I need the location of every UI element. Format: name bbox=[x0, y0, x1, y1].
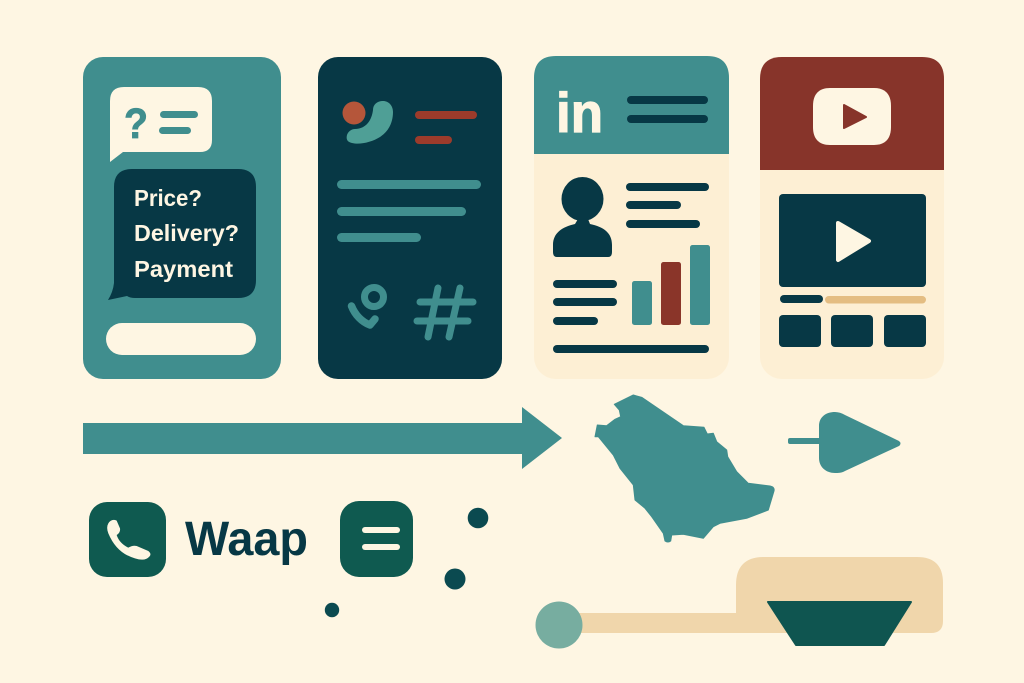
linkedin header bbox=[534, 56, 729, 154]
icon: menu tile bbox=[340, 501, 413, 577]
brand name: Waap bbox=[185, 513, 308, 566]
scattered dots bbox=[325, 508, 488, 617]
connector with tray bbox=[536, 557, 943, 648]
icon: question speech bubble: ? bbox=[124, 100, 148, 148]
video player bbox=[779, 194, 926, 287]
icon: location call bbox=[352, 288, 384, 325]
panel: linkedin card bbox=[534, 56, 729, 379]
bar chart bbox=[632, 245, 710, 325]
callout: price delivery payment: Payment bbox=[134, 256, 233, 282]
panel: youtube card bbox=[760, 57, 944, 379]
map: Saudi Arabia bbox=[595, 395, 774, 542]
thumbnails bbox=[779, 315, 926, 347]
profile lines bbox=[553, 183, 709, 353]
icon: dot and comma shape bbox=[342, 101, 393, 144]
callout: price delivery payment: Price? bbox=[134, 185, 202, 211]
linkedin header: in bbox=[556, 81, 603, 144]
callout: price delivery payment: Delivery? bbox=[134, 220, 239, 246]
panel: question card bbox=[83, 57, 281, 379]
icon: profile person bbox=[553, 177, 612, 257]
arrow: large teal bbox=[83, 407, 562, 469]
callout: price delivery payment bbox=[108, 169, 256, 300]
input field bbox=[106, 323, 256, 355]
header lines bbox=[415, 111, 477, 144]
icon: phone tile bbox=[89, 502, 166, 577]
text lines bbox=[337, 180, 481, 242]
arrow: small teal pointer bbox=[788, 412, 900, 473]
icon: hash bbox=[417, 288, 473, 337]
icon: question speech bubble bbox=[110, 87, 212, 162]
youtube header bbox=[760, 57, 944, 170]
progress bar bbox=[780, 295, 926, 304]
panel: dark contact card bbox=[318, 57, 502, 379]
